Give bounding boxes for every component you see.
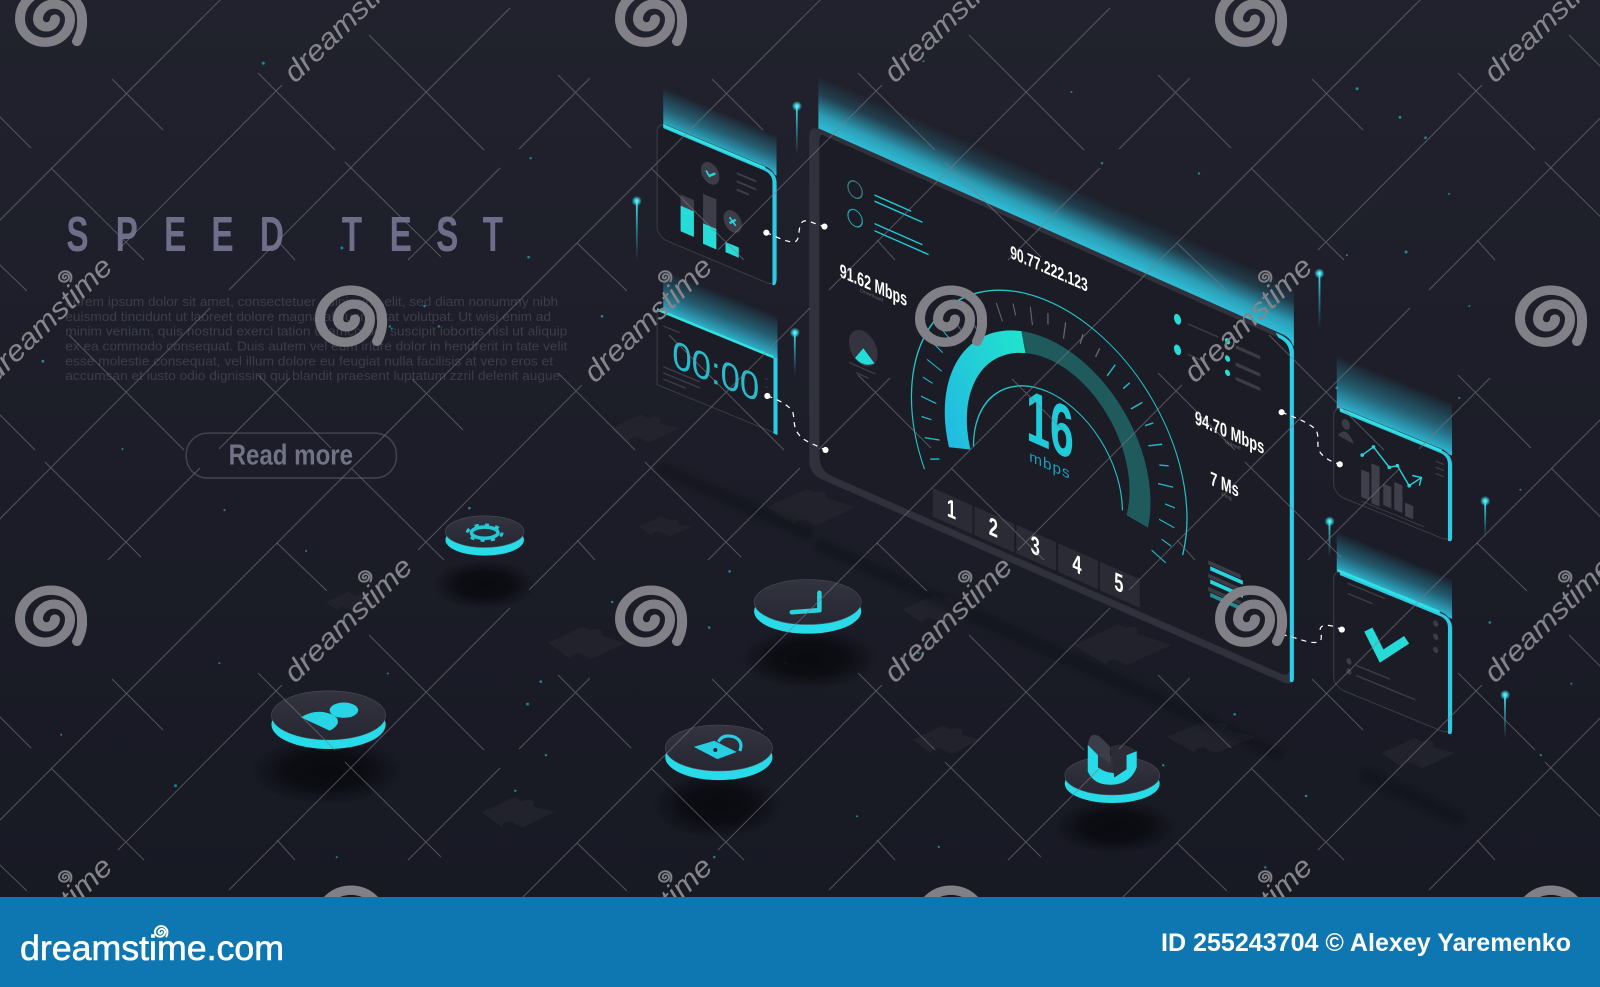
- ip address: 90.77.222.123: [1010, 243, 1088, 297]
- icon: gear: [467, 525, 502, 540]
- number selector: [933, 487, 1140, 608]
- dust particles: [41, 60, 1572, 869]
- timer readout: 00:00: [672, 331, 759, 411]
- line chart with arrow: [1360, 445, 1421, 488]
- icon: 3d chart: [1088, 735, 1137, 785]
- ping stat: [1210, 468, 1239, 505]
- body text: minim veniam, quis nostrud exerci tation ullamcorper suscipit lobortis nisl ut aliquip: [65, 325, 567, 339]
- speed unit: mbps: [1029, 448, 1071, 483]
- icon: user: [301, 703, 358, 731]
- upload stat: 94.70 Mbps: [1195, 408, 1264, 459]
- number selector: 3: [1031, 530, 1040, 562]
- ping stat: Ping: [1221, 492, 1232, 502]
- watermark text: dreamstime: [878, 551, 1019, 689]
- download stat: Download: [860, 288, 883, 304]
- panel: confirmation card: [1334, 530, 1452, 735]
- panel: graph card: [1334, 353, 1452, 542]
- body text: euismod tincidunt ut laoreet dolore magna aliquam erat volutpat. Ut wisi enim ad: [65, 310, 551, 324]
- icon: cross badge: [723, 207, 742, 236]
- body text: esse molestie consequat, vel illum dolore eu feugiat nulla facilisis at vero eros et: [65, 354, 554, 368]
- number selector: 1: [947, 493, 956, 526]
- icon: clock hands: [792, 593, 819, 612]
- connector: chart card: [763, 221, 828, 242]
- icon disc: settings: [445, 516, 524, 556]
- icon: check mark: [1368, 630, 1407, 656]
- connector: timer card: [764, 393, 829, 453]
- download stat: [840, 260, 907, 314]
- body text: Lorem ipsum dolor sit amet, consectetuer adipiscing elit, sed diam nonummy nibh: [65, 295, 558, 309]
- speed value: 16: [1026, 374, 1074, 477]
- panel: timer card: [657, 266, 778, 435]
- download stat: 91.62 Mbps: [840, 260, 907, 311]
- connector: graph card: [1279, 409, 1343, 467]
- watermark text: dreamstime: [278, 551, 419, 689]
- panel ground shadows: [663, 469, 1457, 818]
- read more button: [186, 433, 396, 478]
- icon disc: user: [271, 691, 386, 749]
- footer banner: [0, 897, 1600, 987]
- icon disc: clock: [754, 580, 861, 634]
- gauge ticks: [921, 257, 1175, 567]
- icon: menu options: [848, 178, 929, 259]
- beacons: [632, 101, 1510, 739]
- icon: check badge: [701, 159, 719, 188]
- upload stat: [1195, 408, 1264, 462]
- pie chart: [849, 325, 878, 382]
- number selector: 2: [989, 511, 998, 544]
- footer credit: ID 255243704 © Alexey Yaremenko: [1161, 929, 1571, 957]
- watermark text: dreamstime: [1178, 251, 1319, 389]
- gauge remaining arc: [1021, 327, 1151, 529]
- body text: [65, 295, 568, 383]
- read more button: Read more: [229, 439, 353, 471]
- watermark text: dreamstime: [1178, 851, 1319, 987]
- icon disc: lock: [665, 725, 772, 780]
- panel: main speed test screen: [809, 128, 1294, 684]
- panel: chart card: [657, 85, 777, 287]
- status list: [1174, 313, 1260, 391]
- bar chart: [681, 184, 739, 259]
- ping stat: 7 Ms: [1210, 468, 1239, 502]
- watermark text: dreamstime: [578, 251, 719, 389]
- body text: accumsan et iusto odio dignissim qui blandit praesent luptatum zzril delenit augue: [65, 369, 560, 383]
- icon: hamburger menu: [1208, 562, 1243, 609]
- panel: main screen glow: [818, 74, 1294, 346]
- gauge filled arc: [945, 297, 1026, 481]
- gauge: [911, 241, 1187, 585]
- watermark text: dreamstime: [578, 851, 719, 987]
- grey bars: [1361, 459, 1413, 520]
- footer logo: dreamstime.com: [20, 929, 284, 968]
- disc shadows: [251, 560, 1174, 853]
- illustration scene: [41, 60, 1572, 869]
- connector: confirmation card: [1279, 625, 1345, 643]
- ground puzzle pieces: [326, 414, 1455, 829]
- title: SPEED TEST: [66, 207, 503, 262]
- number selector: 5: [1114, 566, 1124, 599]
- number selector: 4: [1072, 548, 1082, 581]
- icon disc: chart: [1065, 735, 1160, 803]
- icon: user: [1338, 416, 1354, 444]
- icon: padlock: [694, 736, 741, 759]
- upload stat: Upload: [1224, 439, 1241, 452]
- body text: ex ea commodo consequat. Duis autem vel eum iriure dolor in hendrerit in tate velit: [65, 340, 568, 354]
